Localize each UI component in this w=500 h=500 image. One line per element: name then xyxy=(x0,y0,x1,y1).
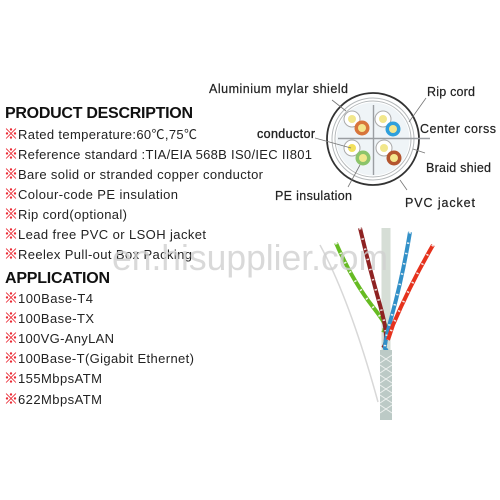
blue pair xyxy=(385,232,410,349)
brown pair xyxy=(360,228,386,348)
product description list: ※ xyxy=(4,204,18,224)
label: PVC jacket: PVC jacket xyxy=(405,196,476,210)
wire pair: top left xyxy=(344,111,370,136)
heading: product description: PRODUCT DESCRIPTION xyxy=(5,105,193,122)
drain wire xyxy=(320,245,378,402)
product description list: ※ xyxy=(4,164,18,184)
product description list: Reelex Pull-out Box Packing xyxy=(18,247,192,262)
watermark: en.hisupplier.com xyxy=(112,237,388,278)
braided shield xyxy=(380,350,392,420)
heading: application: APPLICATION xyxy=(5,270,110,287)
application list: ※ xyxy=(4,389,18,409)
red pair xyxy=(388,245,433,340)
wire pair: bottom right xyxy=(376,140,402,166)
product description list: ※ xyxy=(4,184,18,204)
application list: 622MbpsATM xyxy=(18,392,102,407)
product description list: Bare solid or stranded copper conductor xyxy=(18,167,264,182)
product description list: ※ xyxy=(4,144,18,164)
label: center cross: Center corss xyxy=(420,122,496,136)
cable photo xyxy=(320,228,433,420)
centre filler tube xyxy=(382,228,390,352)
cross-section diagram xyxy=(315,93,430,190)
centre cross xyxy=(338,105,430,175)
product description list: Reference standard :TIA/EIA 568B IS0/IEC II801 xyxy=(18,147,312,162)
application list: 100Base-TX xyxy=(18,311,94,326)
application list: ※ xyxy=(4,348,18,368)
product description list: Rated temperature:60℃,75℃ xyxy=(18,124,197,143)
application list: ※ xyxy=(4,288,18,308)
product description list: Lead free PVC or LSOH jacket xyxy=(18,227,206,242)
product description list: ※ xyxy=(4,244,18,264)
wire pair: bottom left xyxy=(344,140,370,166)
product description list: Colour-code PE insulation xyxy=(18,187,178,202)
product description list: ※ xyxy=(4,224,18,244)
application list: 100Base-T4 xyxy=(18,291,93,306)
application list: 100VG-AnyLAN xyxy=(18,331,114,346)
application list: 100Base-T(Gigabit Ethernet) xyxy=(18,351,194,366)
application list: 155MbpsATM xyxy=(18,371,102,386)
application list: ※ xyxy=(4,308,18,328)
product description list: ※ xyxy=(4,124,18,144)
label: rip cord: Rip cord xyxy=(427,85,475,99)
PVC jacket ring xyxy=(327,93,419,185)
label: conductor: conductor xyxy=(257,127,315,141)
application list: ※ xyxy=(4,328,18,348)
braid and mylar rings xyxy=(332,98,414,180)
leader lines xyxy=(315,98,426,190)
label: aluminium mylar shield: Aluminium mylar shield xyxy=(209,82,348,96)
application list xyxy=(4,288,194,409)
green pair xyxy=(336,243,386,331)
product description list xyxy=(4,124,312,264)
label: PE insulation: PE insulation xyxy=(275,189,352,203)
application list: ※ xyxy=(4,368,18,388)
product description list: Rip cord(optional) xyxy=(18,207,127,222)
wire pair: top right xyxy=(375,111,400,136)
label: braid shield: Braid shied xyxy=(426,161,491,175)
